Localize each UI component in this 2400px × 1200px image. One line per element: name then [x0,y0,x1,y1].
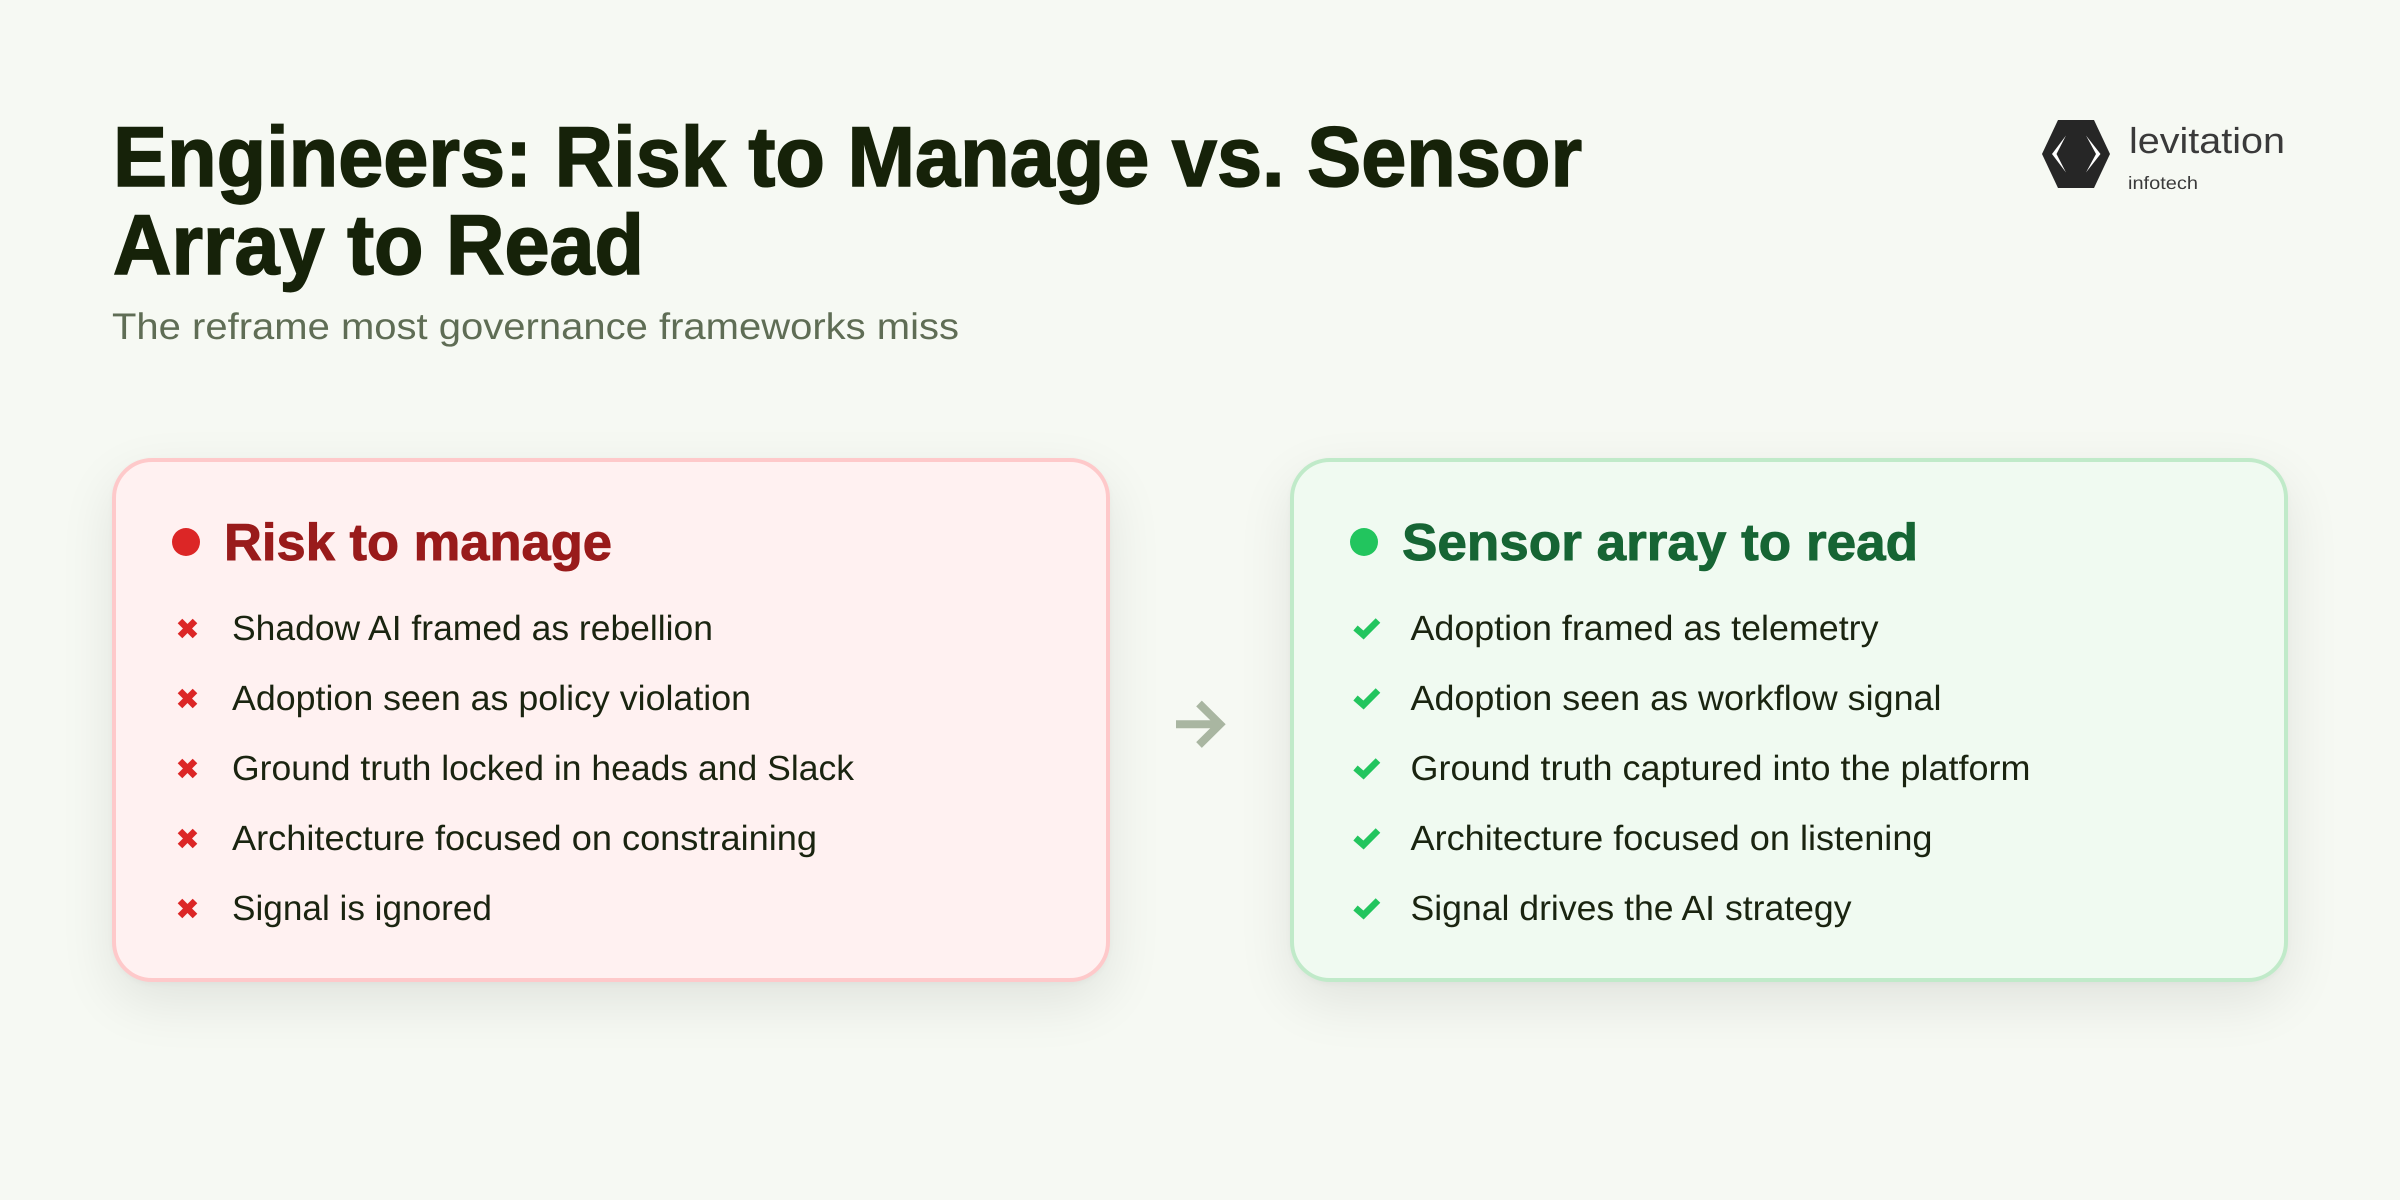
title [113,110,1582,293]
arrow [1176,700,1226,748]
item 2: Adoption seen as workflow signal [1410,679,1942,718]
item 1: Adoption framed as telemetry [1410,609,1879,648]
item 3: Ground truth captured into the platform [1410,749,2030,788]
title: Engineers: Risk to Manage vs. Sensor [113,110,1582,205]
subtitle: The reframe most governance frameworks miss [112,306,959,347]
logo subtext: infotech [2128,173,2198,193]
title: Array to Read [113,198,644,293]
logo: levitation infotech [2042,120,2285,193]
list: sensor items [1356,609,2030,928]
item 1: Shadow AI framed as rebellion [232,609,713,648]
item 4: Architecture focused on listening [1410,819,1932,858]
panel: risk to manage [112,458,1110,982]
item 3: Ground truth locked in heads and Slack [232,749,854,788]
panel heading: Risk to manage [224,514,612,572]
item 5: Signal drives the AI strategy [1410,889,1852,928]
panel: sensor array to read [1290,458,2288,982]
status dot: red [172,528,200,556]
item 5: Signal is ignored [232,889,492,928]
icon: hexagon with chevrons [2042,120,2110,188]
header: title and subtitle [112,110,1582,347]
logo wordmark: levitation [2129,120,2285,161]
status dot: green [1350,528,1378,556]
item 2: Adoption seen as policy violation [232,679,751,718]
list: risk items [180,609,854,928]
item 4: Architecture focused on constraining [232,819,817,858]
panel heading: Sensor array to read [1402,514,1918,572]
